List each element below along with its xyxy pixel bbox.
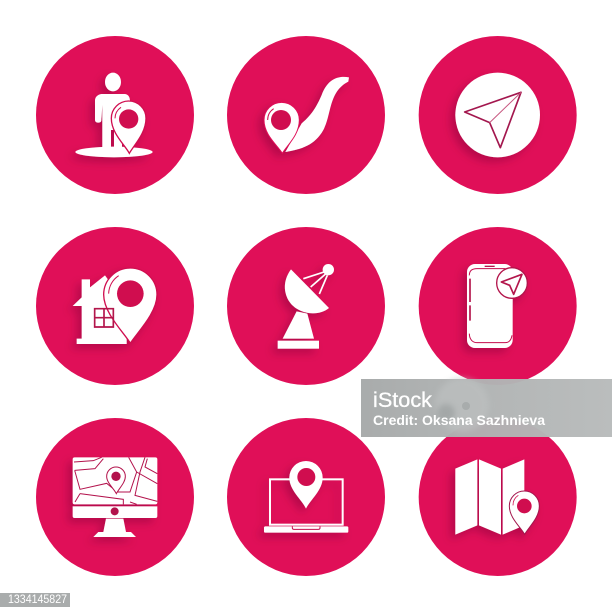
icon: white disc with paper plane outline: [455, 73, 540, 157]
watermark credit text: Credit: Oksana Sazhnieva: [373, 412, 545, 428]
icon: monitor showing street map: [73, 457, 157, 537]
icon: laptop and location pin: [264, 461, 348, 533]
panel: folded map with pin: [419, 418, 577, 576]
icon: radar dish on pedestal: [278, 264, 334, 349]
icon: person standing on a spot with pin: [75, 73, 153, 157]
panel: house with pin: [36, 227, 194, 385]
watermark logo text: iStock: [373, 389, 433, 412]
panel: smartphone with navigation badge: [419, 227, 577, 385]
panel: route with pin: [227, 36, 385, 194]
panel: satellite dish: [227, 227, 385, 385]
image id number: 1334145827: [8, 594, 67, 606]
watermark band: [361, 378, 612, 437]
icon: house and large pin: [73, 268, 157, 344]
icon: winding road and pin: [264, 77, 349, 153]
panel: person with location pin: [36, 36, 194, 194]
icon: phone and arrow badge: [467, 264, 527, 348]
image id tag: [0, 593, 70, 607]
icon: folded map and pin: [455, 459, 539, 535]
panel: laptop with pin: [227, 418, 385, 576]
panel: desktop monitor with map: [36, 418, 194, 576]
panel: navigation arrow: [419, 36, 577, 194]
